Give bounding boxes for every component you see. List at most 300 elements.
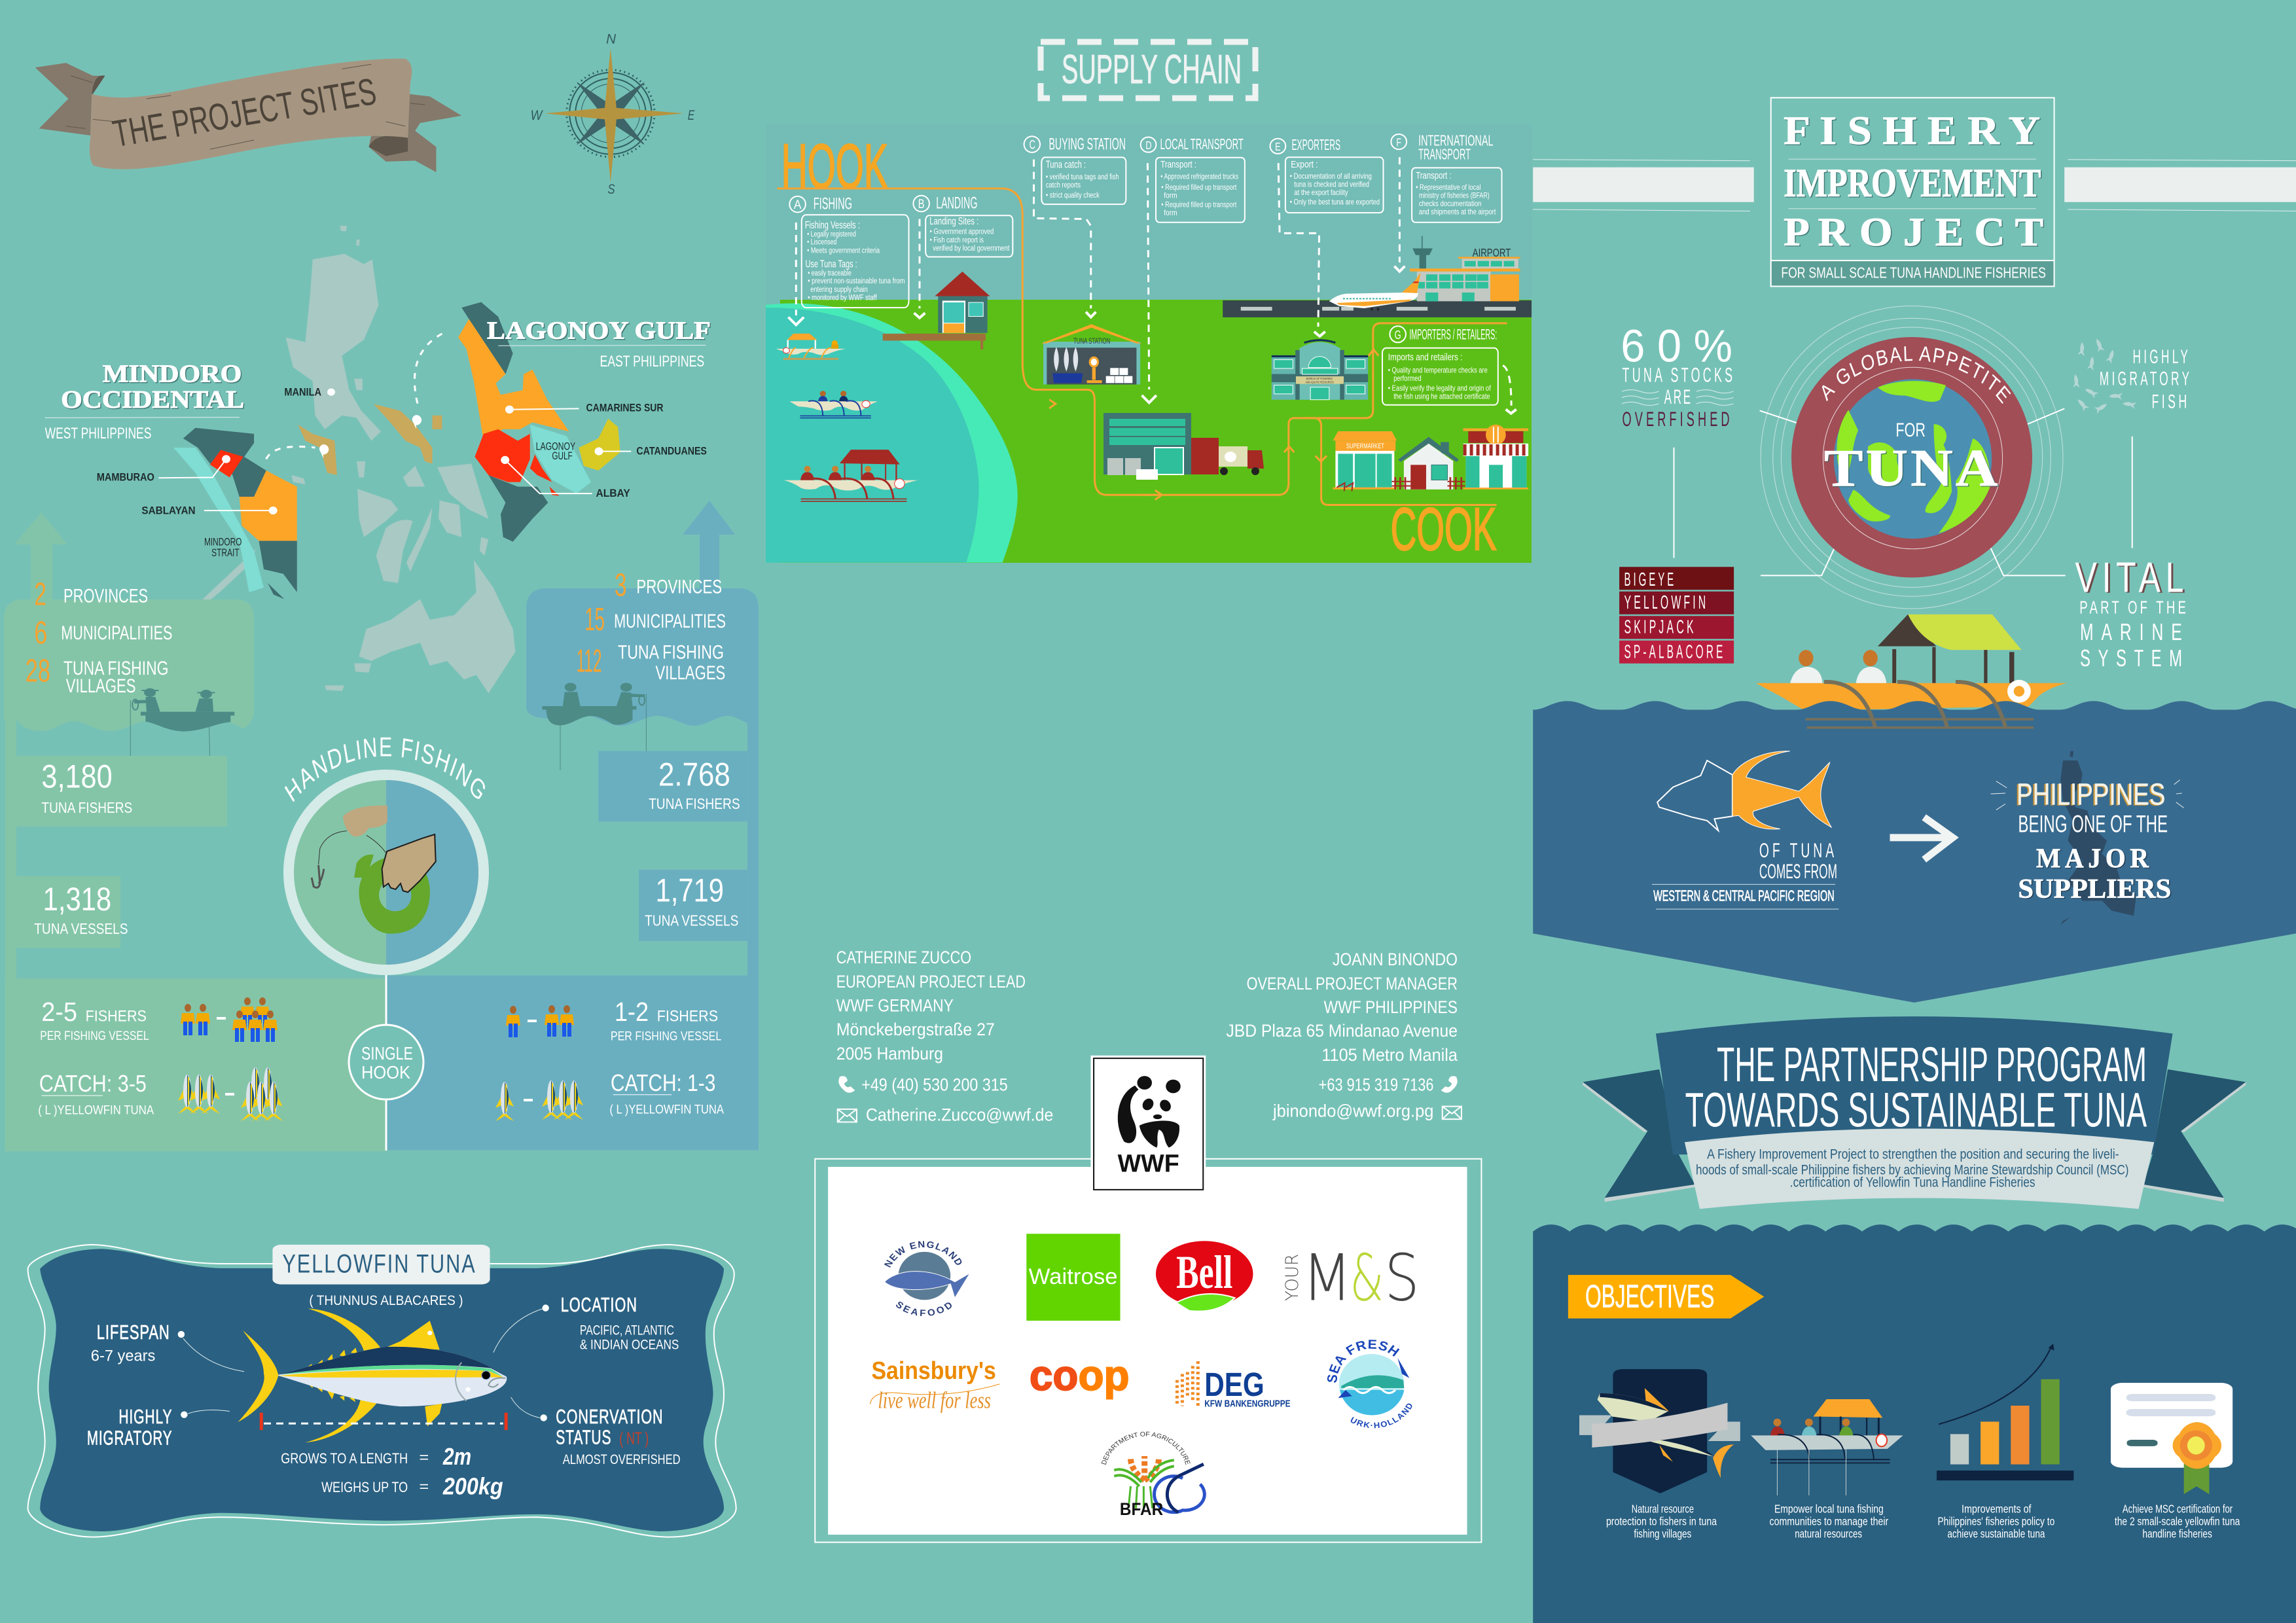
map labels and leader lines: MINDORO [204, 535, 242, 548]
logo: Your M&S: & [1350, 1241, 1384, 1315]
step G: importers and retailers: the fish using he attached certificate [1393, 393, 1490, 401]
panel: yellowfin tuna: ALMOST OVERFISHED [563, 1452, 681, 1467]
objective 3: bar chart of policy improvements: achieve sustainable tuna [1947, 1527, 2045, 1540]
callout: lifespan [91, 1321, 244, 1372]
logo: New England Seafood: SEAFOOD [896, 1302, 952, 1316]
step A: fishing: FISHING [814, 195, 852, 213]
contact: Catherine Zucco [836, 948, 1053, 1124]
step G: importers and retailers: performed [1393, 374, 1422, 383]
illustration: supermarket: SUPERMARKET [1346, 442, 1384, 450]
badge: single hook: HOOK [361, 1062, 410, 1082]
logo: Sea Fresh [1327, 1340, 1412, 1428]
step C: buying station: • verified tuna tags and fish [1046, 173, 1119, 182]
contact: Catherine Zucco: Mönckebergstraße 27 [836, 1020, 995, 1039]
heading: Mindoro Occidental: OCCIDENTAL [61, 386, 244, 414]
map: Philippines islands [193, 226, 515, 693]
statistic blocks: 1-2 [615, 997, 649, 1027]
note: highly migratory fish: FISH [2152, 390, 2190, 412]
route lines [1139, 323, 1507, 505]
heading: hook: HOOK [781, 131, 888, 202]
panel: yellowfin tuna: PACIFIC, ATLANTIC [580, 1322, 674, 1338]
step E: exporters: EXPORTERS [1291, 136, 1340, 153]
illustration: tuna station: TUNA STATION [1073, 338, 1110, 346]
note: vital part of the marine system [2075, 554, 2190, 671]
step E: exporters: • Documentation of all arriving [1290, 172, 1372, 181]
objective 4: MSC certificate [2111, 1383, 2240, 1540]
callout: highly migratory: MIGRATORY [87, 1427, 172, 1450]
panel: fishery improvement project intro: TUNA STOCKS [1623, 364, 1735, 387]
map labels and leader lines: LAGONOY [536, 440, 575, 452]
step F: international transport: ministry of fisheries (BFAR) [1419, 192, 1490, 200]
illustration: landing house and dock [883, 272, 990, 349]
step E: exporters: Export : [1291, 158, 1318, 169]
step D: local transport: • Required filled up transport [1161, 183, 1237, 192]
logo: DEG: KFW BANKENGRUPPE [1204, 1399, 1291, 1410]
illustration: bureau of fisheries building: AND AQUATIC RESOURCES [1305, 380, 1334, 383]
contact: Catherine Zucco: WWF GERMANY [836, 996, 954, 1015]
step C: buying station [1024, 135, 1126, 317]
boat outrigger [1806, 718, 2034, 729]
step G: importers and retailers: IMPORTERS / RETAILERS: [1409, 327, 1497, 343]
objective 1: resource protection: Natural resource [1632, 1503, 1694, 1516]
step A: fishing: • Legally registered [807, 230, 856, 239]
step F: international transport: INTERNATIONAL [1418, 132, 1494, 149]
step A: fishing: Use Tuna Tags : [805, 258, 857, 270]
map labels and leader lines: ALBAY [596, 487, 630, 499]
panel: west statistics box: 6 [34, 615, 47, 651]
icon: compass [530, 31, 695, 197]
panel: yellowfin tuna: CONERVATION [556, 1406, 663, 1428]
panel: fishery improvement project intro: MIGRATORY [2100, 367, 2192, 389]
logo: Sainsbury's [870, 1357, 999, 1414]
arrow [1890, 817, 1953, 860]
objective 3: bar chart of policy improvements [1937, 1344, 2073, 1540]
logo: Waitrose [1026, 1234, 1121, 1321]
contact: Catherine Zucco: +49 (40) 530 200 315 [861, 1075, 1008, 1094]
panel: fishery improvement project intro: HIGHLY [2132, 346, 2191, 367]
stat: 60% tuna stocks overfished: ARE [1664, 386, 1693, 408]
logo: Your M&S: M [1302, 1241, 1352, 1315]
step D: local transport [1141, 135, 1245, 402]
illustration: airport [1410, 236, 1520, 301]
panel: east statistics box: 3 [615, 567, 627, 603]
panel: fishery improvement project intro [1533, 97, 2296, 717]
panel: east statistics box: 112 [577, 643, 601, 679]
illustration: tuna station [1041, 324, 1141, 384]
contact: Catherine Zucco: Catherine.Zucco@wwf.de [866, 1105, 1053, 1124]
statistic blocks: FISHERS [657, 1008, 718, 1025]
logo: DEG [1177, 1361, 1291, 1410]
icons: tuna catch [178, 1067, 583, 1121]
step G: importers and retailers: • Quality and temperature checks are [1388, 366, 1488, 374]
panel: west statistics box: 28 [26, 652, 50, 688]
boat silhouette with fishers west [130, 688, 234, 766]
logo: WWF panda: WWF [1118, 1150, 1179, 1177]
logo: Your M&S: YOUR [1282, 1254, 1302, 1301]
step E: exporters: • Only the best tuna are exported [1290, 198, 1380, 207]
logo: coop: coop [1030, 1352, 1129, 1399]
panel: west statistics box: TUNA FISHING [63, 658, 168, 679]
step A: fishing: • Meets government criteria [807, 246, 880, 255]
panel: east statistics box: VILLAGES [656, 662, 725, 684]
contact: Joann Binondo: +63 915 319 7136 [1319, 1075, 1433, 1094]
statistic blocks: 3,180 [41, 758, 113, 794]
logo: Your M&S: S [1385, 1241, 1420, 1315]
globe: a global appetite for tuna: FOR [1895, 419, 1926, 440]
step B: landing: • Government approved [930, 227, 994, 236]
illustration: boat red [784, 450, 918, 502]
step C: buying station: • strict quality check [1046, 191, 1100, 200]
step F: international transport: and shipments at the airport [1419, 208, 1496, 217]
callout: lifespan: LIFESPAN [97, 1321, 170, 1344]
side bars [1533, 160, 2296, 211]
step D: local transport: LOCAL TRANSPORT [1160, 135, 1244, 153]
logo: DEG: DEG [1204, 1366, 1265, 1404]
step E: exporters: E [1275, 140, 1281, 153]
logo: Sea Fresh: SEA FRESH [1327, 1340, 1399, 1383]
panel: philippine tuna supply wave: OF TUNA [1759, 839, 1837, 862]
panel: east statistics box: MUNICIPALITIES [614, 611, 726, 632]
icons: fishers per vessel [181, 997, 574, 1042]
tag: objectives [1568, 1275, 1764, 1319]
species list: SKIPJACK [1624, 616, 1696, 637]
species list: YELLOWFIN [1624, 592, 1708, 613]
logo: BFAR: BFAR [1120, 1499, 1163, 1519]
fact: weight [321, 1473, 503, 1499]
logo: BFAR [1101, 1432, 1206, 1519]
icon: tuna half outline [1657, 751, 1831, 830]
contact: Joann Binondo: JOANN BINONDO [1333, 950, 1458, 969]
step F: international transport [1391, 132, 1502, 272]
map labels and leader lines: CAMARINES SUR [586, 401, 664, 414]
statistic blocks: TUNA VESSELS [645, 912, 738, 929]
step A: fishing: • easily traceable [808, 269, 852, 277]
logo: New England Seafood [884, 1241, 969, 1316]
logo: Your M&S [1282, 1241, 1420, 1315]
stat: 60% tuna stocks overfished: 6 0 % [1621, 321, 1732, 372]
map: project site provinces [173, 302, 620, 599]
note: vital part of the marine system: VITAL [2075, 554, 2189, 601]
statistic blocks: FISHERS [86, 1008, 147, 1025]
step D: local transport: • Required filled up transport [1161, 201, 1237, 209]
subtitle: species: ( THUNNUS ALBACARES ) [309, 1293, 463, 1308]
step B: landing [913, 194, 1013, 318]
statistic blocks: TUNA VESSELS [34, 920, 128, 937]
callout: location [493, 1294, 679, 1353]
contact: Catherine Zucco: CATHERINE ZUCCO [836, 948, 971, 967]
contact: Catherine Zucco: EUROPEAN PROJECT LEAD [836, 972, 1026, 991]
step B: landing: Landing Sites : [929, 215, 978, 227]
stat: 60% tuna stocks overfished [1621, 321, 1735, 431]
callout: lifespan: 6-7 years [91, 1347, 155, 1364]
callout: location: LOCATION [561, 1294, 637, 1316]
objective 2: empower communities [1751, 1399, 1903, 1540]
title: fishery improvement project [1771, 98, 2054, 287]
title: fishery improvement project: IMPROVEMENT [1784, 160, 2041, 205]
heading: Lagonoy Gulf: LAGONOY GULF [487, 317, 711, 344]
step B: landing: LANDING [936, 194, 977, 212]
text: Philippines major suppliers [1991, 778, 2184, 904]
contact: Joann Binondo: JBD Plaza 65 Mindanao Avenue [1226, 1021, 1458, 1041]
callout: highly migratory: HIGHLY [118, 1406, 172, 1428]
callout: conservation status [511, 1397, 681, 1467]
panel: west statistics box [4, 512, 254, 980]
title: fishery improvement project: P R O J E C T [1784, 209, 2043, 255]
objective 1: resource protection [1579, 1369, 1740, 1540]
icon: compass: E [688, 107, 695, 123]
panel: objectives [1533, 1224, 2296, 1623]
text: of tuna comes from [1652, 839, 1839, 909]
step G: importers and retailers: • Easily verify the legality and origin of [1388, 384, 1491, 393]
illustration: airport: AIRPORT [1473, 246, 1511, 259]
panel: handline fishing comparison [5, 737, 759, 1152]
panel: project sites map [35, 31, 711, 693]
note: vital part of the marine system: MARINE [2080, 619, 2190, 645]
heading: Lagonoy Gulf [487, 317, 711, 370]
map labels and leader lines: MANILA [284, 385, 321, 399]
statistic blocks: CATCH: 1-3 [611, 1070, 715, 1096]
logo: Bell: Bell [1176, 1247, 1232, 1298]
map labels and leader lines: STRAIT [211, 546, 240, 559]
badge: single hook [349, 1025, 423, 1099]
boat outrigger arcs [1824, 682, 2005, 727]
step A: fishing: • Liscensed [807, 238, 836, 247]
callout: highly migratory [87, 1406, 230, 1450]
panel: contacts and partners [814, 948, 1482, 1543]
heading: Lagonoy Gulf: EAST PHILIPPINES [600, 353, 704, 370]
logo: Waitrose: Waitrose [1029, 1264, 1118, 1289]
icon: compass: W [530, 107, 544, 123]
statistic blocks: TUNA FISHERS [41, 799, 132, 816]
species list [1619, 567, 1734, 664]
step D: local transport: D [1145, 139, 1152, 152]
title: fishery improvement project: F I S H E R Y [1784, 108, 2040, 153]
contact: Joann Binondo: OVERALL PROJECT MANAGER [1247, 974, 1458, 993]
text: Philippines major suppliers: MAJOR [2036, 844, 2153, 874]
panel: yellowfin tuna: & INDIAN OCEANS [580, 1336, 679, 1352]
globe: a global appetite for tuna [1791, 337, 2032, 577]
fact: length [281, 1443, 471, 1470]
illustration: restaurant [1463, 425, 1528, 490]
step A: fishing: • prevent non-sustainable tuna from [808, 277, 905, 286]
circle: handline illustration [289, 775, 484, 970]
step G: importers and retailers [1382, 326, 1516, 414]
panel: east statistics box: 15 [584, 601, 605, 637]
sea [766, 303, 1018, 563]
objective 2: empower communities: natural resources [1795, 1527, 1862, 1540]
map labels and leader lines: SABLAYAN [141, 504, 196, 517]
callout: conservation status: STATUS [556, 1426, 611, 1448]
step F: international transport: • Representative of local [1416, 183, 1480, 192]
step D: local transport: • Approved refrigerated trucks [1160, 173, 1239, 181]
ribbon: partnership program: .certification of Yellowfin Tuna Handline Fisheries [1790, 1174, 2035, 1190]
statistic blocks: ( L )YELLOWFIN TUNA [38, 1103, 154, 1117]
step C: buying station: C [1030, 137, 1035, 152]
objective 3: bar chart of policy improvements: Improvements of [1962, 1503, 2032, 1516]
leader lines [1674, 408, 2132, 575]
fact: weight: 200kg [442, 1473, 503, 1499]
step E: exporters: tuna is checked and verified [1294, 181, 1369, 189]
panel: east statistics box: TUNA FISHING [618, 642, 724, 663]
statistic blocks: ( L )YELLOWFIN TUNA [609, 1102, 724, 1116]
species list: BIGEYE [1624, 569, 1676, 590]
statistic blocks: TUNA FISHERS [649, 795, 740, 812]
icon: compass: N [606, 31, 616, 46]
illustration: tuna [238, 1309, 507, 1442]
illustration: boat blue [789, 391, 878, 418]
step C: buying station: Tuna catch : [1046, 158, 1086, 170]
fact: length: GROWS TO A LENGTH [281, 1450, 408, 1467]
statistic blocks: PER FISHING VESSEL [40, 1028, 149, 1043]
logo: WWF panda [1090, 1056, 1206, 1192]
thin orbit rings [1761, 306, 2063, 609]
boat silhouette with fishers east [542, 683, 646, 770]
supply chain right half [1139, 132, 1532, 563]
step E: exporters: at the export facility [1294, 188, 1348, 197]
panel: objectives: OBJECTIVES [1585, 1278, 1714, 1314]
step B: landing: • Fish catch report is [930, 236, 984, 245]
objective 2: empower communities: Empower local tuna fishing [1774, 1503, 1884, 1516]
step A: fishing [788, 195, 909, 325]
panel: philippine tuna supply wave [1533, 701, 2296, 1209]
panel: east statistics box [526, 501, 759, 980]
step F: international transport: TRANSPORT [1418, 145, 1471, 163]
illustration: airplane [1329, 273, 1421, 311]
map labels and leader lines: MAMBURAO [97, 471, 154, 483]
contact: Joann Binondo [1226, 950, 1462, 1120]
text: Philippines major suppliers: PHILIPPINES [2017, 778, 2165, 812]
step B: landing: verified by local government [933, 243, 1009, 253]
runway [1223, 300, 1532, 317]
step F: international transport: checks documentation [1419, 200, 1482, 208]
panel: fishery improvement project intro: SP-ALBACORE [1624, 641, 1725, 662]
panel: yellowfin tuna [28, 1245, 736, 1537]
step A: fishing: • monitored by WWF staff [808, 293, 877, 302]
fact: weight: = [419, 1478, 429, 1495]
statistic blocks: 2-5 [41, 997, 77, 1027]
heading: handline fishing on arc: HANDLINE FISHING [284, 737, 485, 802]
globe: a global appetite for tuna: TUNA [1824, 440, 2001, 497]
panel: fishery improvement project intro: OVERFISHED [1623, 408, 1733, 431]
contact: Joann Binondo: WWF PHILIPPINES [1324, 997, 1458, 1017]
step F: international transport: Transport : [1416, 169, 1452, 181]
illustration: bureau of fisheries building [1272, 340, 1368, 400]
panel: supply chain scene [766, 42, 1532, 563]
panel: east statistics box: PROVINCES [636, 576, 722, 597]
illustration: fishing boat [1756, 615, 2067, 711]
illustration: bureau of fisheries building: BUREAU OF FISHERIES [1306, 377, 1333, 380]
globe: a global appetite for tuna: A GLOBAL APPETITE [1822, 346, 2011, 404]
logo: New England Seafood: NEW ENGLAND [884, 1241, 962, 1268]
step D: local transport: form [1164, 192, 1177, 200]
map labels and leader lines: CATANDUANES [636, 444, 707, 457]
text: Philippines major suppliers: SUPPLIERS [2018, 874, 2171, 904]
panel: west statistics box: MUNICIPALITIES [61, 622, 172, 644]
illustration: supermarket [1333, 431, 1397, 491]
note: vital part of the marine system: PART OF THE [2079, 598, 2189, 618]
step D: local transport: Transport : [1160, 158, 1196, 169]
step A: fishing: A [794, 198, 802, 212]
objective 1: resource protection: protection to fishers in tuna [1606, 1515, 1717, 1528]
statistic blocks: 1,719 [656, 872, 724, 909]
partner frame [815, 1159, 1481, 1543]
logo: Sea Fresh: URK·HOLLAND [1351, 1403, 1412, 1428]
contact: Joann Binondo: 1105 Metro Manila [1321, 1045, 1458, 1065]
contact: Joann Binondo: jbinondo@wwf.org.pg [1272, 1101, 1433, 1120]
step D: local transport: form [1164, 209, 1177, 217]
logo: Bell [1156, 1241, 1253, 1311]
panel: yellowfin tuna: 2m [442, 1443, 471, 1470]
step A: fishing: Fishing Vessels : [805, 219, 860, 231]
statistic blocks: 2.768 [658, 756, 730, 793]
note: vital part of the marine system: SYSTEM [2080, 645, 2190, 671]
fact: length: = [419, 1449, 429, 1466]
step F: international transport: F [1396, 135, 1401, 149]
panel: objectives: communities to manage their [1770, 1515, 1888, 1528]
logo: Sainsbury's: live well for less [878, 1388, 991, 1414]
title: supply chain: SUPPLY CHAIN [1062, 47, 1242, 92]
callout: conservation status: ( NT ) [619, 1429, 649, 1448]
logo: Sainsbury's: Sainsbury's [871, 1357, 996, 1385]
heading: Mindoro Occidental: WEST PHILIPPINES [45, 425, 151, 442]
map labels and leader lines [97, 334, 707, 559]
divider: single hook line [385, 975, 387, 1150]
badge: single hook: SINGLE [361, 1043, 413, 1063]
banner: the project sites [35, 59, 461, 172]
supply chain left half [766, 131, 1158, 563]
panel: west statistics box: VILLAGES [66, 675, 135, 697]
contact: Catherine Zucco: 2005 Hamburg [836, 1044, 943, 1063]
fact: weight: WEIGHS UP TO [321, 1478, 408, 1495]
panel: philippine tuna supply wave: COMES FROM [1759, 860, 1837, 883]
title: fishery improvement project: FOR SMALL SCALE TUNA HANDLINE FISHERIES [1781, 264, 2046, 281]
step B: landing: B [918, 197, 925, 211]
step G: importers and retailers: Imports and retailers : [1388, 351, 1462, 363]
panel: philippine tuna supply wave: WESTERN & CENTRAL PACIFIC REGION [1653, 887, 1835, 904]
logo: BFAR: DEPARTMENT OF AGRICULTURE [1101, 1432, 1191, 1465]
statistic blocks [5, 751, 759, 1151]
ribbon: partnership program [1583, 1016, 2246, 1209]
statistic blocks: 1,318 [43, 881, 111, 918]
illustration: boat small orange [776, 334, 846, 360]
panel: yellowfin tuna: YELLOWFIN TUNA [282, 1249, 476, 1278]
note: highly migratory fish [2073, 338, 2192, 414]
route line [777, 188, 1158, 495]
panel: objectives: Philippines' fisheries policy to [1938, 1515, 2054, 1528]
step C: buying station: BUYING STATION [1049, 135, 1126, 153]
title: supply chain [1041, 42, 1255, 98]
icon: compass: S [607, 181, 615, 197]
step G: importers and retailers: G [1395, 328, 1401, 342]
map labels and leader lines: GULF [552, 450, 573, 462]
heading: Mindoro Occidental [45, 361, 244, 442]
heading: Mindoro Occidental: MINDORO [103, 361, 242, 387]
illustration: house [1392, 437, 1465, 490]
silhouette: Philippines [2060, 751, 2136, 925]
step E: exporters [1270, 136, 1384, 336]
statistic blocks: CATCH: 3-5 [39, 1071, 147, 1097]
step A: fishing: entering supply chain [810, 285, 868, 294]
heading: cook: COOK [1391, 496, 1496, 563]
panel: west statistics box: 2 [34, 576, 46, 612]
panel: west statistics box: PROVINCES [63, 585, 148, 607]
objective 1: resource protection: fishing villages [1634, 1527, 1691, 1540]
banner: the project sites: THE PROJECT SITES [109, 70, 380, 155]
title pill: yellowfin tuna [272, 1245, 490, 1285]
illustration: warehouse and truck [1103, 413, 1264, 480]
step C: buying station: catch reports [1046, 181, 1081, 190]
statistic blocks: PER FISHING VESSEL [611, 1029, 721, 1043]
